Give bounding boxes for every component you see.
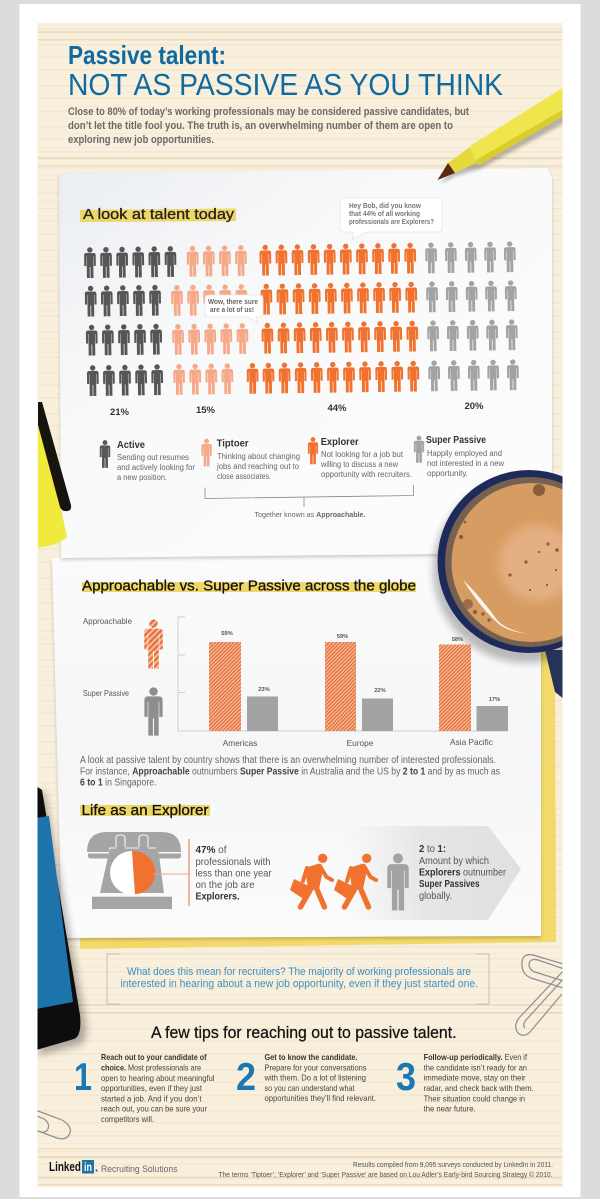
logo: LinkedIn Recruiting Solutions: Linked [49, 1160, 81, 1174]
tip 3: the candidate isn’t ready for an [424, 1062, 527, 1072]
stat: 2 to 1 [419, 844, 506, 902]
icon: coffee cup top view [429, 470, 562, 698]
stat: 2 to 1: globally. [419, 891, 452, 902]
icon: super passive person [387, 853, 409, 910]
chart description text: For instance, Approachable outnumbers Super Passive in Australia and the US by 2 to 1 and by as much as [80, 766, 500, 778]
icon: yellow highlighter top right [438, 88, 570, 184]
legend: super passive: not interested in a new [427, 459, 504, 468]
legend: super passive [414, 434, 504, 478]
tip 1: Reach out to your candidate of [101, 1052, 207, 1062]
bar chart: Asia Pacific [450, 737, 493, 747]
bracket: together known as approachable: Together known as Approachable. [254, 510, 366, 519]
tip 2 [236, 1052, 376, 1103]
footnote: Results compiled from 9,095 surveys conducted by LinkedIn in 2011. [353, 1162, 553, 1169]
legend: tiptoer: Thinking about changing [217, 452, 300, 461]
lower paper sheet [52, 555, 541, 940]
active people [84, 246, 178, 396]
stat: 47 percent: less than one year [196, 868, 272, 880]
title: Passive talent: [68, 40, 226, 70]
footnote: The terms ‘Tiptoer’, ‘Explorer’ and ‘Super Passive’ are based on Lou Adler’s Early-bird Sourcing Strategy © 2010. [218, 1171, 553, 1179]
chart description text: A look at passive talent by country shows that there is an overwhelming number of interested professionals. [80, 755, 496, 766]
stat: 2 to 1: Super Passives [419, 879, 480, 890]
icon: pen and yellow marker left [38, 402, 71, 547]
legend: active: a new position. [117, 473, 167, 482]
stat: 47 percent: professionals with [196, 856, 271, 868]
legend: tiptoer [201, 438, 300, 481]
tip 3: immediate move, stay on their [424, 1072, 526, 1082]
speech bubble: Hey Bob: professionals are Explorers? [349, 217, 434, 226]
tiptoe people [170, 245, 249, 395]
yellow paper behind lower sheet [80, 640, 556, 949]
legend: active: and actively looking for [117, 463, 195, 472]
icon: smartphone left [36, 786, 86, 1055]
tip 1: competitors will. [101, 1114, 154, 1124]
legend: tiptoer: jobs and reaching out to [216, 462, 300, 471]
percentage labels: 20% [464, 401, 484, 412]
chart legend: approachable [83, 616, 163, 669]
speech bubble: Wow [205, 295, 263, 323]
percentage labels: 15% [196, 405, 216, 416]
callout: interested in hearing about a new job opportunity, even if they just started one. [120, 978, 478, 990]
bar chart: 22% [374, 688, 386, 694]
legend: explorer: Explorer [321, 436, 359, 448]
icon: two walking explorers with briefcases [290, 854, 376, 907]
tip 3: radar, and check back with them. [424, 1083, 534, 1093]
heading: a look at talent today: A look at talent today [83, 207, 235, 223]
stat: 2 to 1: 2 to 1: [419, 844, 446, 855]
legend: active: Active [117, 439, 145, 451]
tip 3: Their situation could change in [424, 1094, 525, 1104]
tip 1 [74, 1052, 215, 1124]
speech bubble: Hey Bob: Hey Bob, did you know [349, 201, 421, 210]
legend: tiptoer: close associates. [217, 472, 271, 481]
intro text: Close to 80% of today’s working professionals may be considered passive candidates, but [68, 106, 469, 118]
legend: active [100, 439, 195, 482]
percentage labels: 21% [110, 407, 130, 418]
tip 1: 1 [74, 1056, 92, 1099]
legend: super passive: Happily employed and [427, 449, 502, 458]
title [68, 40, 503, 102]
super passive people [425, 241, 519, 391]
heading: approachable vs super passive: Approachable vs. Super Passive across the globe [82, 578, 416, 594]
speech bubble: Wow: Wow, there sure [208, 297, 258, 306]
tip 3 [396, 1052, 534, 1114]
bar chart [178, 617, 508, 748]
icon: paper clip left [38, 1110, 71, 1140]
bar chart: 58% [452, 637, 463, 643]
icon: telephone with pie [87, 832, 189, 909]
legend: super passive: Super Passive [426, 434, 486, 446]
chart legend: approachable: Approachable [83, 616, 132, 626]
legend: super passive: opportunity. [427, 469, 468, 478]
bar chart: 59% [337, 634, 348, 640]
arrow panel [345, 826, 521, 920]
chart description text: 6 to 1 in Singapore. [80, 778, 156, 788]
callout: What does this mean for recruiters? The majority of working professionals are [127, 966, 471, 978]
pictogram: talent people grid [84, 241, 519, 396]
tip 2: 2 [236, 1056, 256, 1099]
chart legend: super passive [83, 687, 163, 736]
logo: LinkedIn Recruiting Solutions: Recruiting Solutions [101, 1164, 178, 1175]
footnote [218, 1162, 553, 1179]
tip 1: choice. Most professionals are [101, 1062, 201, 1072]
bar chart: Americas [223, 738, 257, 748]
tip 1: open to hearing about meaningful [101, 1073, 215, 1083]
tips heading: A few tips for reaching out to passive talent. [151, 1023, 456, 1042]
logo: LinkedIn Recruiting Solutions [49, 1160, 178, 1175]
tip 2: Get to know the candidate. [264, 1052, 358, 1062]
heading: life as an explorer: Life as an Explorer [82, 803, 209, 819]
tip 3: Follow-up periodically. Even if [424, 1052, 528, 1062]
legend: explorer: willing to discuss a new [320, 460, 398, 469]
legend: explorer: opportunity with recruiters. [321, 470, 412, 479]
icon: paper clips right [515, 954, 562, 1036]
speech bubble: Hey Bob [340, 198, 442, 240]
bar chart: 23% [258, 687, 270, 693]
title: NOT AS PASSIVE AS YOU THINK [68, 67, 503, 102]
speech bubble: Hey Bob: that 44% of all working [349, 209, 420, 218]
tip 2: so you can understand what [264, 1083, 355, 1093]
tip 1: started a job. And if you don’t [101, 1094, 202, 1104]
tip 2: opportunities they’ll find relevant. [264, 1093, 376, 1103]
tip 2: Prepare for your conversations [264, 1062, 366, 1072]
legend: explorer [308, 436, 412, 479]
legend: explorer: Not looking for a job but [321, 450, 404, 459]
bar chart: 59% [221, 631, 233, 637]
stat: 47 percent: 47% of [196, 844, 227, 856]
bar chart: 17% [489, 697, 500, 703]
stat: 2 to 1: Explorers outnumber [419, 868, 506, 878]
logo: LinkedIn Recruiting Solutions: in [84, 1162, 92, 1174]
intro text: don’t let the title fool you. The truth is, an overwhelming number of them are open to [68, 120, 453, 132]
upper paper sheet [59, 168, 552, 560]
speech bubble: Wow: are a lot of us! [210, 305, 254, 314]
tip 2: with them. Do a lot of listening [264, 1072, 366, 1082]
intro text: exploring new job opportunities. [68, 134, 214, 146]
chart description text [80, 755, 500, 788]
bracket: together known as approachable [205, 485, 414, 519]
percentage labels [110, 401, 484, 418]
stat: 47 percent: on the job are [196, 879, 255, 891]
percentage labels: 44% [327, 403, 347, 414]
tip 1: opportunities, even if they just [101, 1083, 203, 1093]
tip 1: reach out, you can be sure your [101, 1104, 207, 1114]
tip 3: the near future. [424, 1104, 476, 1114]
explorer people [245, 243, 419, 394]
stat: 47 percent: Explorers. [196, 890, 240, 902]
stat: 47 percent [189, 839, 272, 906]
stat: 2 to 1: Amount by which [419, 856, 489, 867]
legend: tiptoer: Tiptoer [217, 438, 249, 450]
tip 3: 3 [396, 1056, 416, 1099]
intro text [68, 106, 469, 146]
chart legend: super passive: Super Passive [83, 688, 129, 698]
legend: active: Sending out resumes [117, 453, 189, 462]
callout [107, 954, 489, 1004]
bar chart: Europe [347, 738, 374, 748]
